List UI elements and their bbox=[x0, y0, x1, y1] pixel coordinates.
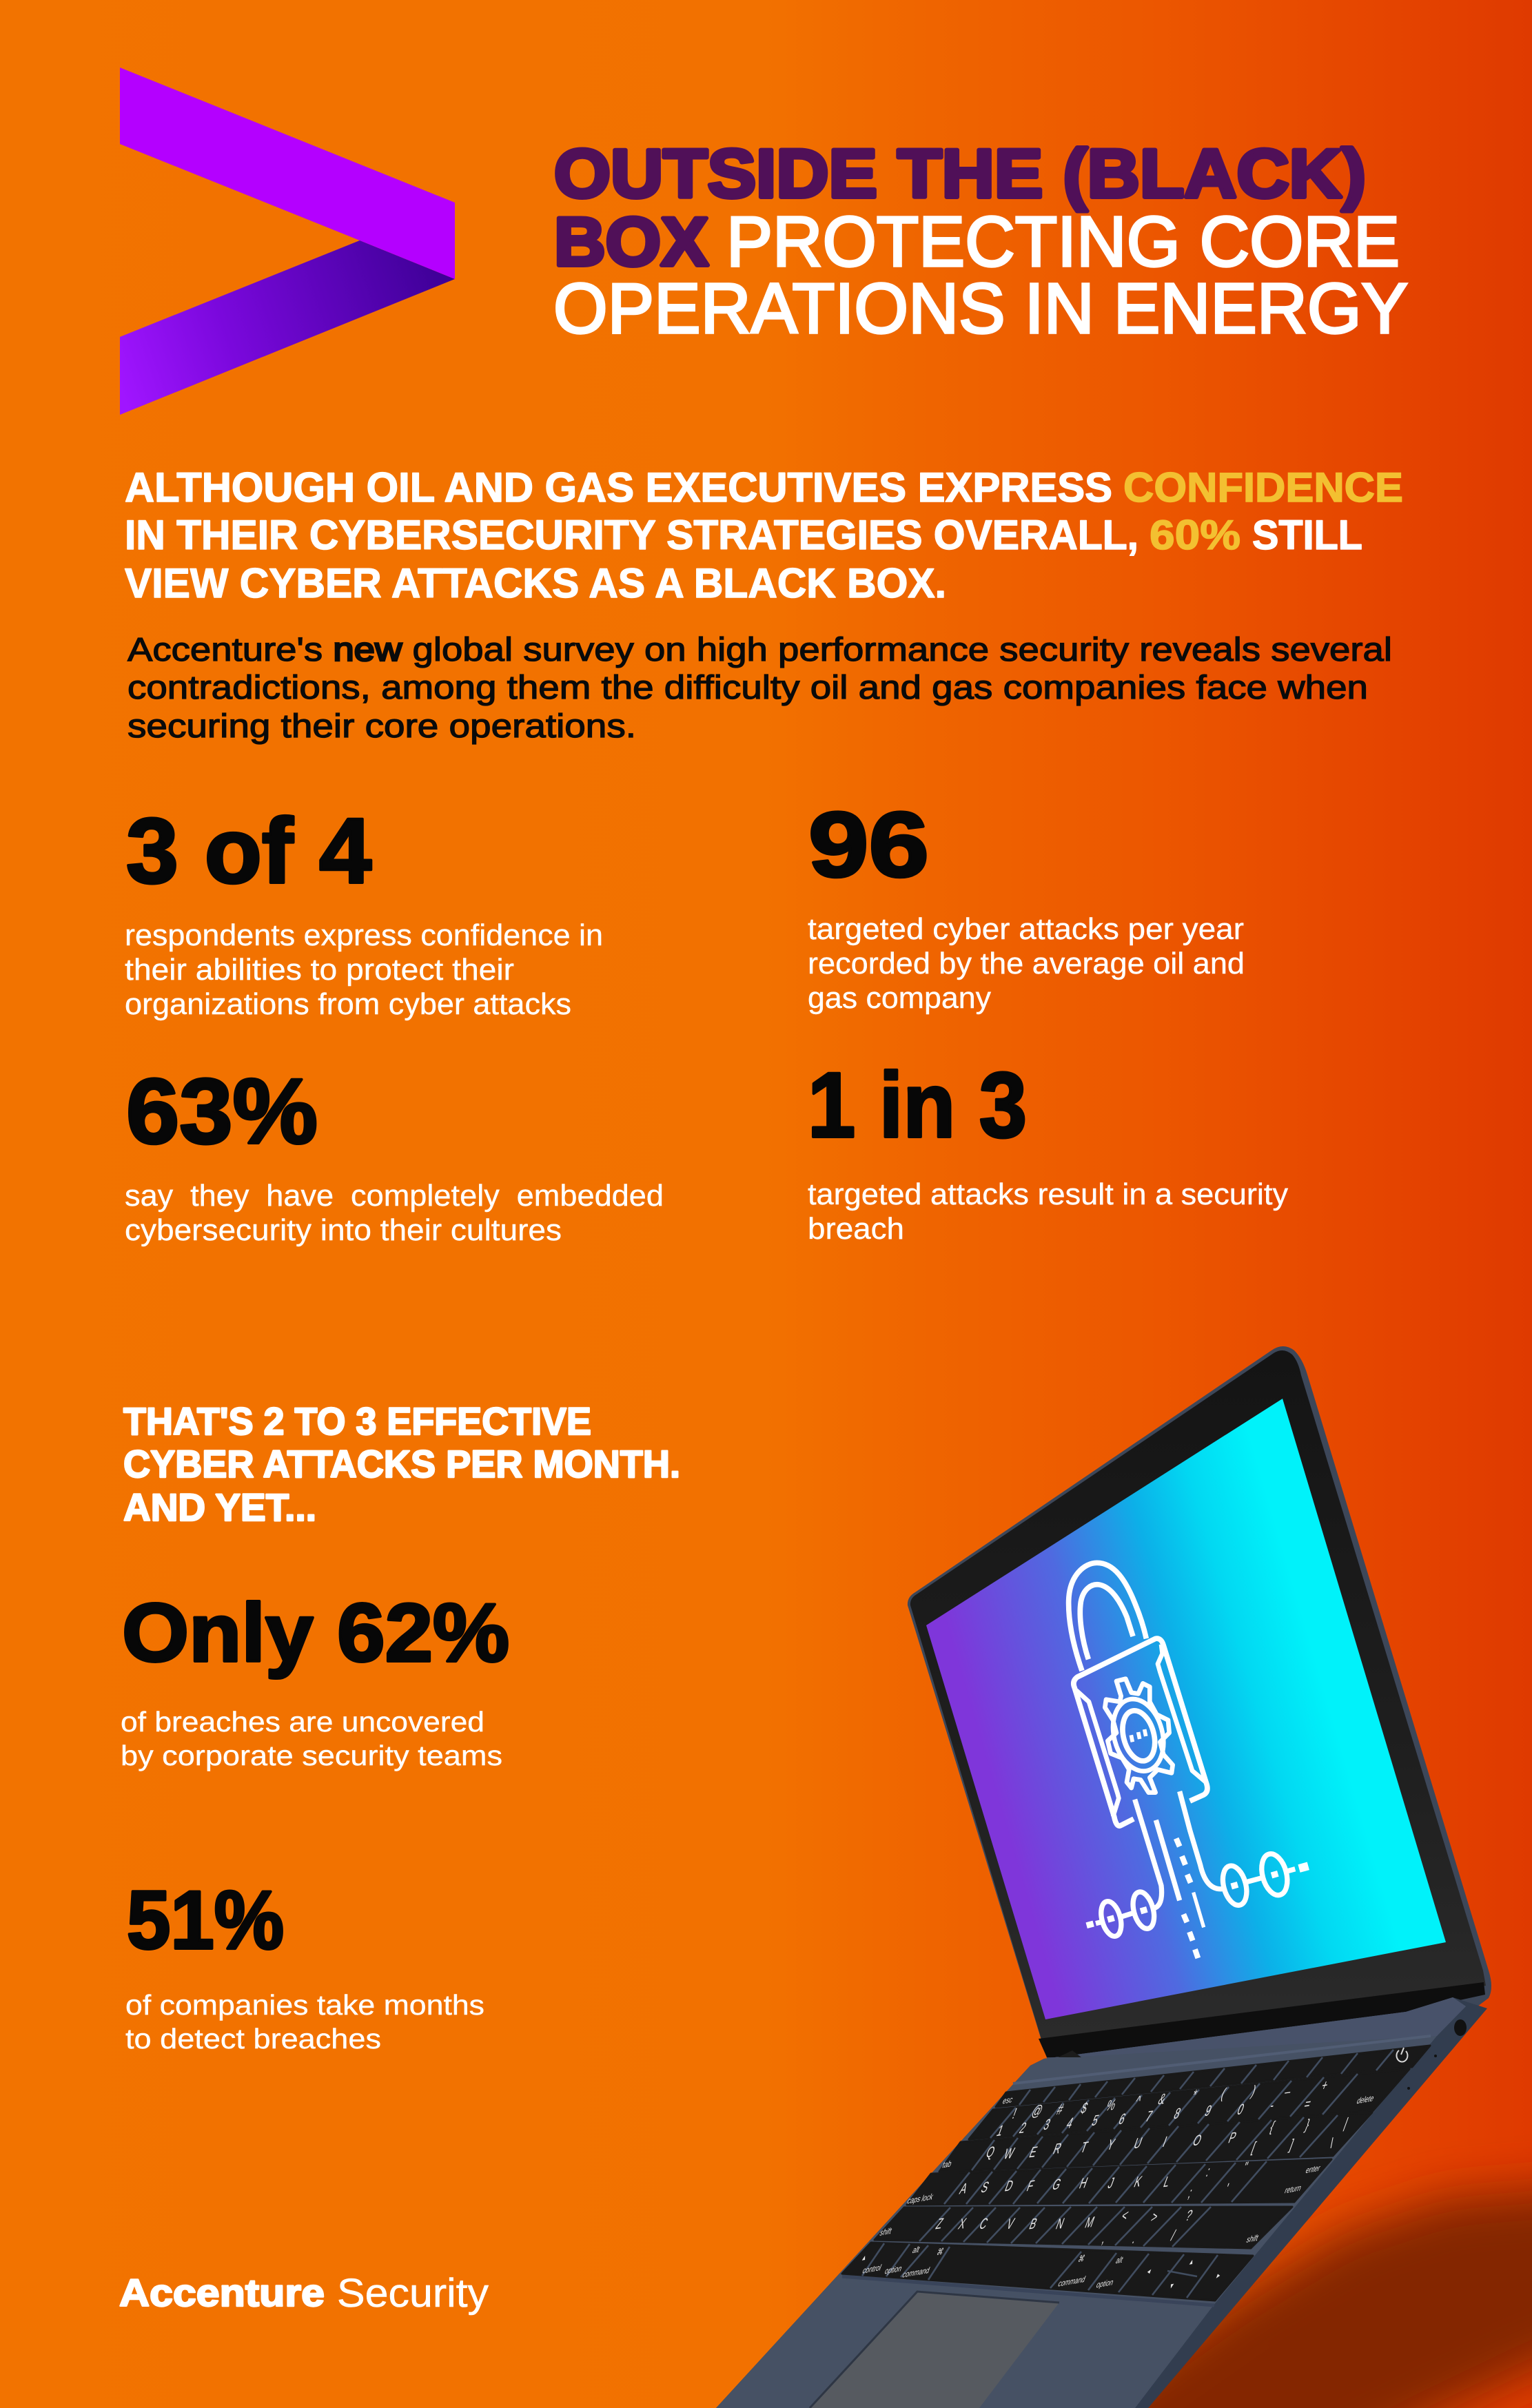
keyboard: X bbox=[956, 2216, 968, 2233]
keyboard: K bbox=[1132, 2174, 1144, 2191]
subheading: and yet: CYBER ATTACKS PER MONTH. bbox=[123, 1442, 680, 1485]
keyboard: ⌘ bbox=[935, 2247, 945, 2258]
keyboard: L bbox=[1161, 2174, 1172, 2191]
stat: 3 of 4: respondents express confidence in bbox=[125, 918, 603, 952]
stat: 96 bbox=[808, 794, 1245, 1015]
keyboard: command bbox=[901, 2266, 931, 2280]
keyboard: ' bbox=[1223, 2181, 1231, 2198]
keyboard: F bbox=[1024, 2178, 1036, 2195]
stat: Only 62%: by corporate security teams bbox=[121, 1740, 502, 1771]
keyboard: control bbox=[861, 2263, 883, 2276]
stat: 63%: say they have completely embedded bbox=[125, 1179, 664, 1213]
laptop cast shadow bbox=[1103, 2185, 1532, 2408]
title: PROTECTING CORE bbox=[726, 202, 1400, 281]
Accenture Security wordmark: Security bbox=[337, 2271, 489, 2316]
keyboard: O bbox=[1190, 2132, 1204, 2150]
keyboard: option bbox=[1095, 2278, 1114, 2290]
intro heading: VIEW CYBER ATTACKS AS A BLACK BOX. bbox=[125, 560, 946, 606]
intro paragraph bbox=[127, 632, 1392, 745]
keyboard: ▴ bbox=[1188, 2257, 1195, 2267]
intro heading: CONFIDENCE bbox=[1123, 464, 1403, 511]
keyboard: [ bbox=[1249, 2139, 1258, 2157]
keyboard: W bbox=[1001, 2145, 1017, 2163]
keyboard: caps lock bbox=[906, 2192, 934, 2206]
intro heading: ALTHOUGH OIL AND GAS EXECUTIVES EXPRESS bbox=[125, 464, 1112, 511]
stat: Only 62%: Only 62% bbox=[122, 1587, 509, 1679]
keyboard: | bbox=[1342, 2115, 1350, 2132]
title: OUTSIDE THE (BLACK) bbox=[554, 135, 1366, 212]
keyboard: { bbox=[1267, 2119, 1277, 2136]
keyboard: alt bbox=[1114, 2256, 1125, 2266]
stat: 63% bbox=[125, 1060, 664, 1247]
padlock body and gear bbox=[1069, 1563, 1207, 1826]
keyboard: option bbox=[884, 2264, 903, 2276]
stat: 96: 96 bbox=[808, 794, 929, 896]
stat: 3 of 4: their abilities to protect their bbox=[125, 953, 514, 987]
keyboard: S bbox=[979, 2179, 991, 2196]
keyboard: 4 bbox=[1064, 2115, 1075, 2132]
stat: 1 in 3: breach bbox=[808, 1212, 904, 1246]
keyboard: return bbox=[1283, 2183, 1303, 2196]
intro heading: STILL bbox=[1252, 512, 1362, 558]
keyboard: enter bbox=[1305, 2164, 1322, 2176]
keyboard: B bbox=[1027, 2216, 1039, 2233]
Accenture Security wordmark: Accenture bbox=[119, 2271, 325, 2314]
keyboard: shift bbox=[879, 2227, 893, 2238]
Accenture Security wordmark bbox=[119, 2271, 489, 2316]
keyboard: 3 bbox=[1041, 2117, 1052, 2134]
keyboard: : bbox=[1204, 2163, 1212, 2181]
keyboard: 9 bbox=[1203, 2103, 1214, 2120]
icon: padlock with gear and circuit lines bbox=[1069, 1563, 1308, 1958]
keyboard: ^ bbox=[1132, 2093, 1143, 2110]
keyboard: ▴ bbox=[861, 2253, 868, 2263]
keyboard: _ bbox=[1284, 2077, 1296, 2095]
stat: 51%: to detect breaches bbox=[125, 2023, 381, 2055]
laptop base bbox=[716, 1997, 1487, 2408]
stat: 1 in 3: 1 in 3 bbox=[808, 1054, 1027, 1157]
keyboard: ? bbox=[1183, 2208, 1194, 2225]
keyboard: P bbox=[1226, 2130, 1238, 2147]
stat: 63%: 63% bbox=[126, 1060, 318, 1163]
keyboard: 0 bbox=[1235, 2101, 1246, 2119]
keyboard: " bbox=[1240, 2159, 1250, 2177]
keyboard: < bbox=[1119, 2208, 1130, 2225]
keyboard: shift bbox=[1245, 2234, 1260, 2245]
keyboard: E bbox=[1027, 2144, 1039, 2161]
intro heading: 60% bbox=[1150, 512, 1240, 558]
keyboard: @ bbox=[1030, 2103, 1045, 2120]
keyboard: G bbox=[1050, 2177, 1063, 2194]
keyboard: command bbox=[1056, 2275, 1087, 2289]
intro heading bbox=[125, 464, 1403, 606]
keyboard: 7 bbox=[1143, 2108, 1154, 2126]
keyboard: delete bbox=[1356, 2094, 1375, 2106]
stat: 3 of 4 bbox=[125, 800, 603, 1021]
keyboard: V bbox=[1004, 2216, 1017, 2233]
stat: 51% bbox=[125, 1874, 484, 2055]
keyboard: 5 bbox=[1090, 2112, 1101, 2130]
keyboard: R bbox=[1051, 2141, 1063, 2158]
laptop lid bbox=[908, 1346, 1491, 2060]
stat: Only 62% bbox=[121, 1587, 509, 1771]
keyboard: 2 bbox=[1017, 2120, 1028, 2137]
keyboard: alt bbox=[911, 2245, 921, 2256]
keyboard: - bbox=[1267, 2097, 1277, 2114]
title: OPERATIONS IN ENERGY bbox=[553, 269, 1408, 348]
keyboard: = bbox=[1302, 2096, 1313, 2113]
keyboard: 6 bbox=[1116, 2111, 1127, 2128]
keyboard: , bbox=[1100, 2230, 1108, 2247]
keyboard: ; bbox=[1186, 2185, 1194, 2202]
stat: Only 62%: of breaches are uncovered bbox=[121, 1706, 484, 1738]
keyboard: ] bbox=[1287, 2137, 1296, 2154]
subheading: and yet bbox=[123, 1399, 680, 1529]
subheading: and yet: AND YET... bbox=[123, 1485, 316, 1529]
title bbox=[553, 135, 1408, 348]
keyboard: U bbox=[1132, 2135, 1144, 2152]
keyboard: 8 bbox=[1172, 2106, 1183, 2123]
keyboard: A bbox=[957, 2181, 970, 2198]
keyboard: Y bbox=[1105, 2137, 1117, 2154]
stat: 1 in 3: targeted attacks result in a security bbox=[808, 1177, 1288, 1211]
stat: 63%: cybersecurity into their cultures bbox=[125, 1213, 562, 1247]
keyboard: esc bbox=[1001, 2095, 1014, 2106]
intro paragraph: securing their core operations. bbox=[127, 708, 636, 745]
subheading: and yet: THAT'S 2 TO 3 EFFECTIVE bbox=[123, 1399, 591, 1443]
intro paragraph: contradictions, among them the difficulty oil and gas companies face when bbox=[127, 670, 1368, 706]
keyboard: D bbox=[1003, 2178, 1015, 2195]
stat: 51%: of companies take months bbox=[125, 1989, 484, 2021]
stat: 96: recorded by the average oil and bbox=[808, 947, 1245, 980]
laptop illustration bbox=[716, 1346, 1491, 2408]
keyboard: Z bbox=[933, 2216, 946, 2233]
keyboard: Q bbox=[983, 2144, 997, 2161]
keyboard: ▾ bbox=[1168, 2281, 1175, 2291]
keyboard: * bbox=[1189, 2087, 1200, 2104]
keyboard: T bbox=[1078, 2139, 1090, 2157]
keyboard: J bbox=[1105, 2175, 1116, 2192]
stat: 3 of 4: 3 of 4 bbox=[126, 800, 371, 903]
stat: 1 in 3 bbox=[808, 1054, 1288, 1246]
keyboard: ▸ bbox=[1215, 2271, 1222, 2281]
stat: 96: targeted cyber attacks per year bbox=[808, 912, 1244, 946]
laptop screen bbox=[926, 1399, 1446, 2019]
keyboard: N bbox=[1054, 2216, 1066, 2233]
keyboard: / bbox=[1169, 2227, 1178, 2245]
keyboard: \ bbox=[1327, 2135, 1336, 2152]
keyboard: tab bbox=[941, 2159, 953, 2170]
keyboard: > bbox=[1149, 2209, 1160, 2226]
stat: 96: gas company bbox=[808, 981, 991, 1015]
keyboard: ! bbox=[1010, 2106, 1019, 2123]
keyboard: C bbox=[977, 2216, 990, 2233]
keyboard: . bbox=[1130, 2230, 1138, 2247]
keyboard: ) bbox=[1249, 2083, 1258, 2100]
title: BOX bbox=[554, 203, 708, 280]
keyboard: ⌘ bbox=[1076, 2254, 1086, 2265]
stat: 3 of 4: organizations from cyber attacks bbox=[125, 987, 571, 1021]
keyboard: M bbox=[1083, 2214, 1096, 2232]
stat: 51%: 51% bbox=[127, 1874, 284, 1966]
icon: Accenture chevron logo bbox=[120, 68, 455, 415]
keyboard bbox=[842, 2046, 1430, 2301]
circuit lines and nodes bbox=[1087, 1791, 1308, 1958]
intro paragraph: Accenture's new global survey on high performance security reveals several bbox=[127, 632, 1392, 668]
keyboard: } bbox=[1303, 2117, 1312, 2134]
keyboard: H bbox=[1077, 2175, 1090, 2192]
keyboard: ◂ bbox=[1145, 2267, 1152, 2276]
intro heading: IN THEIR CYBERSECURITY STRATEGIES OVERALL, bbox=[125, 512, 1138, 558]
keyboard: 1 bbox=[994, 2123, 1005, 2140]
keyboard: + bbox=[1319, 2077, 1330, 2095]
keyboard: ( bbox=[1218, 2086, 1228, 2103]
keyboard: $ bbox=[1079, 2100, 1090, 2117]
keyboard: # bbox=[1054, 2101, 1065, 2119]
keyboard: & bbox=[1156, 2091, 1168, 2108]
keyboard: I bbox=[1161, 2134, 1169, 2151]
keyboard: % bbox=[1104, 2097, 1118, 2114]
